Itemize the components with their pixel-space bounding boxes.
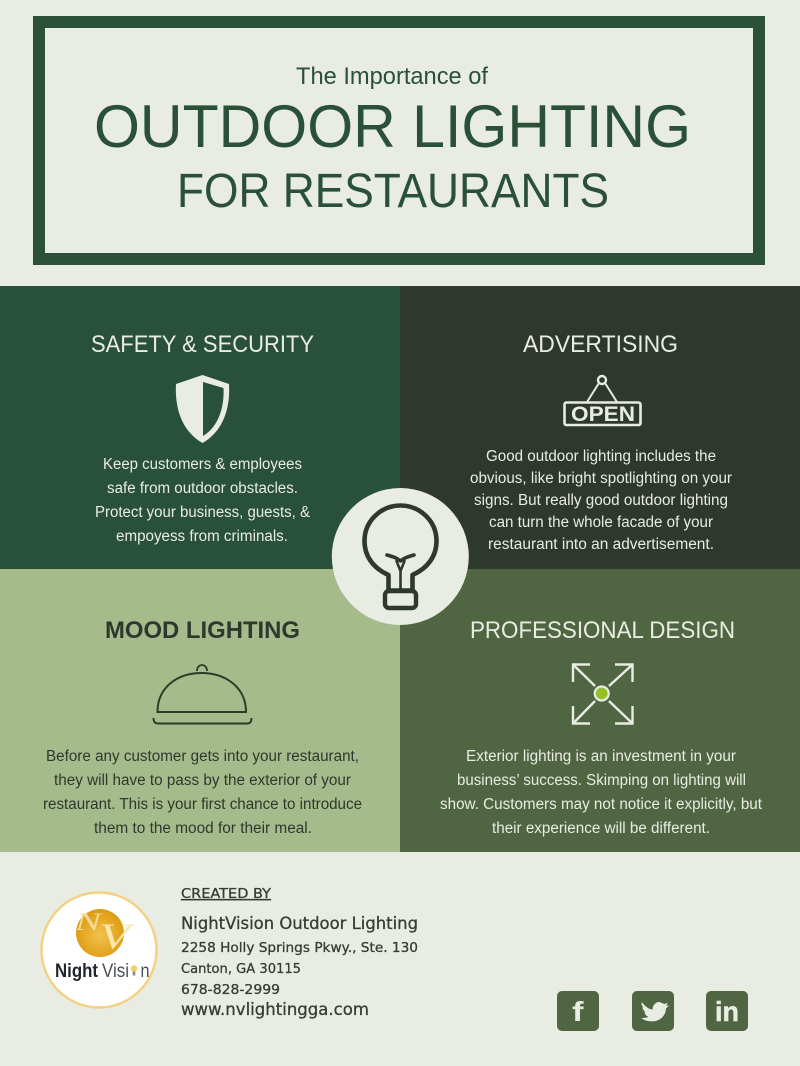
text block: professional design description: show. Customers may not notice it explicitly, but [440,796,763,813]
address line 1: 2258 Holly Springs Pkwy., Ste. 130 [181,940,418,956]
logo monogram letter N: N [73,909,103,936]
logo monogram letter V: V [99,916,136,956]
icon: shield [176,375,229,443]
website: www.nvlightingga.com [181,1000,369,1019]
address line 2: Canton, GA 30115 [181,961,301,977]
text block: advertising description: can turn the whole facade of your [489,514,713,531]
center badge: light bulb [332,488,469,625]
text block: safety description: safe from outdoor obstacles. [107,480,298,497]
icon: light bulb [364,506,436,608]
social icon: facebook [557,991,599,1031]
panel: mood lighting [0,569,400,852]
heading: advertising: ADVERTISING [523,331,678,358]
text block: professional design description: their experience will be different. [492,820,710,837]
title line: for restaurants: FOR RESTAURANTS [177,165,609,218]
panel: professional design [400,569,800,852]
heading: safety and security: SAFETY & SECURITY [91,331,314,358]
text block: advertising description: obvious, like bright spotlighting on your [470,470,732,487]
phone number: 678-828-2999 [181,982,280,998]
text block: safety description: empoyess from criminals. [116,528,288,545]
text block: advertising description: signs. But really good outdoor lighting [474,492,728,509]
text block: safety description: Protect your business, guests, & [95,504,311,521]
icon: food cloche [154,665,252,724]
icon: expanding arrows [573,664,632,724]
text block: professional design description [440,748,763,837]
heading: professional design: PROFESSIONAL DESIGN [470,617,735,644]
text block: safety description: Keep customers & employees [103,456,302,473]
heading: mood lighting: MOOD LIGHTING [105,617,300,644]
social icon: facebook: f [572,996,584,1027]
text block: mood description [43,748,362,837]
social icon: linkedin [706,991,748,1031]
logo: night vision [42,892,156,1008]
company name: NightVision Outdoor Lighting [181,914,418,933]
text block: safety description [95,456,311,545]
social icon: twitter [632,991,674,1031]
footer: created by text [181,886,418,1019]
label: created by: CREATED BY [181,886,272,902]
logo bulb [131,965,137,976]
text block: professional design description: business’ success. Skimping on lighting will [457,772,746,789]
logo wordmark: vision: Visi [102,961,129,982]
text block: mood description: restaurant. This is your first chance to introduce [43,796,362,813]
icon: open sign: OPEN [571,403,635,426]
text block: advertising description [470,448,732,553]
text block: advertising description: Good outdoor lighting includes the [486,448,716,465]
text block: mood description: Before any customer gets into your restaurant, [46,748,359,765]
text block: mood description: them to the mood for their meal. [94,820,312,837]
title line: outdoor lighting: OUTDOOR LIGHTING [94,93,691,160]
title frame [39,22,759,259]
panel: advertising [400,286,800,569]
icon: open sign [564,376,640,426]
text block: mood description: they will have to pass by the exterior of your [54,772,351,789]
logo wordmark: final letter: n [140,961,150,982]
text block: professional design description: Exterior lighting is an investment in your [466,748,736,765]
title block [39,22,759,259]
logo wordmark: night: Night [55,961,99,982]
title line: the importance of: The Importance of [296,63,488,90]
text block: advertising description: restaurant into an advertisement. [488,536,714,553]
logo emblem: gold disc [76,909,124,957]
panel: safety and security [0,286,400,569]
social icon: linkedin: in [715,996,739,1027]
